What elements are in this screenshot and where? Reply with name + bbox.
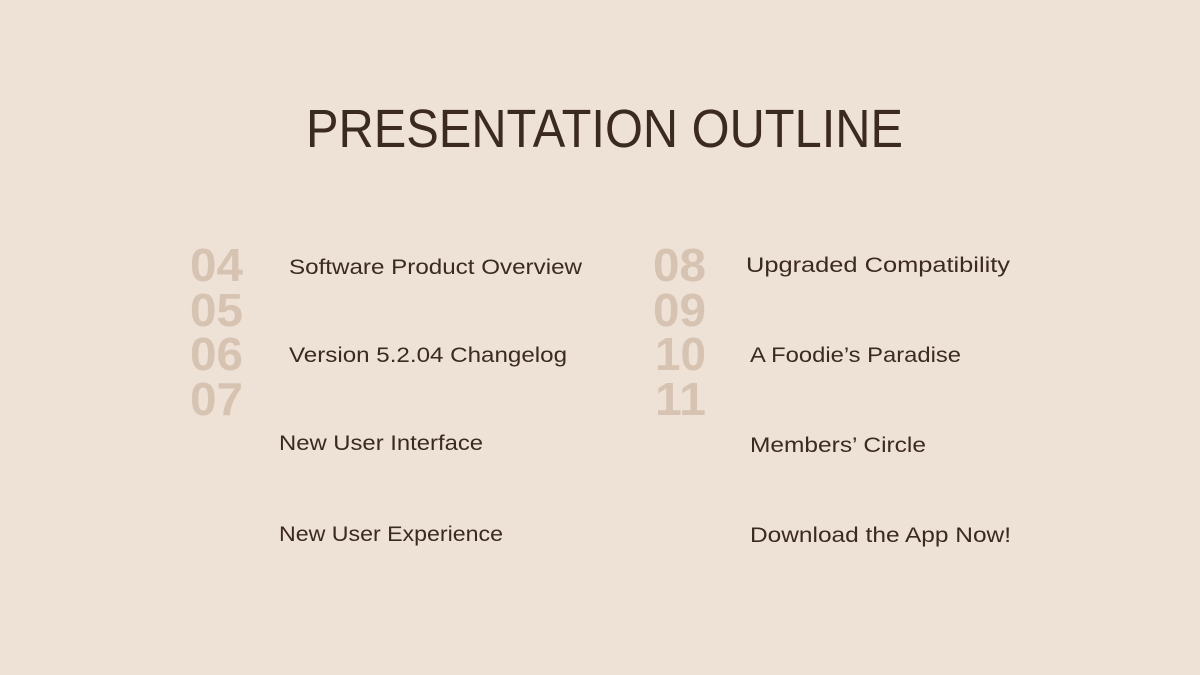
items: right column: Download the App Now!	[750, 524, 1011, 547]
items: left column: New User Experience	[279, 523, 503, 546]
numbers: left column: 05	[190, 284, 243, 336]
numbers: right column: 08	[653, 239, 706, 291]
items: right column: Upgraded Compatibility	[746, 254, 1011, 277]
items: left column: Software Product Overview	[289, 256, 583, 279]
numbers: right column	[653, 239, 706, 425]
numbers: left column: 07	[190, 373, 243, 425]
items: left column	[279, 256, 583, 546]
items: right column	[746, 254, 1011, 547]
items: left column: New User Interface	[279, 432, 483, 455]
title: PRESENTATION OUTLINE	[306, 99, 903, 159]
numbers: left column: 04	[190, 239, 243, 291]
numbers: right column: 11	[655, 373, 706, 425]
numbers: right column: 09	[653, 284, 706, 336]
numbers: right column: 10	[655, 328, 706, 380]
numbers: left column	[190, 239, 243, 425]
items: left column: Version 5.2.04 Changelog	[289, 344, 567, 367]
items: right column: A Foodie’s Paradise	[750, 344, 961, 367]
items: right column: Members’ Circle	[750, 434, 926, 457]
numbers: left column: 06	[190, 328, 243, 380]
